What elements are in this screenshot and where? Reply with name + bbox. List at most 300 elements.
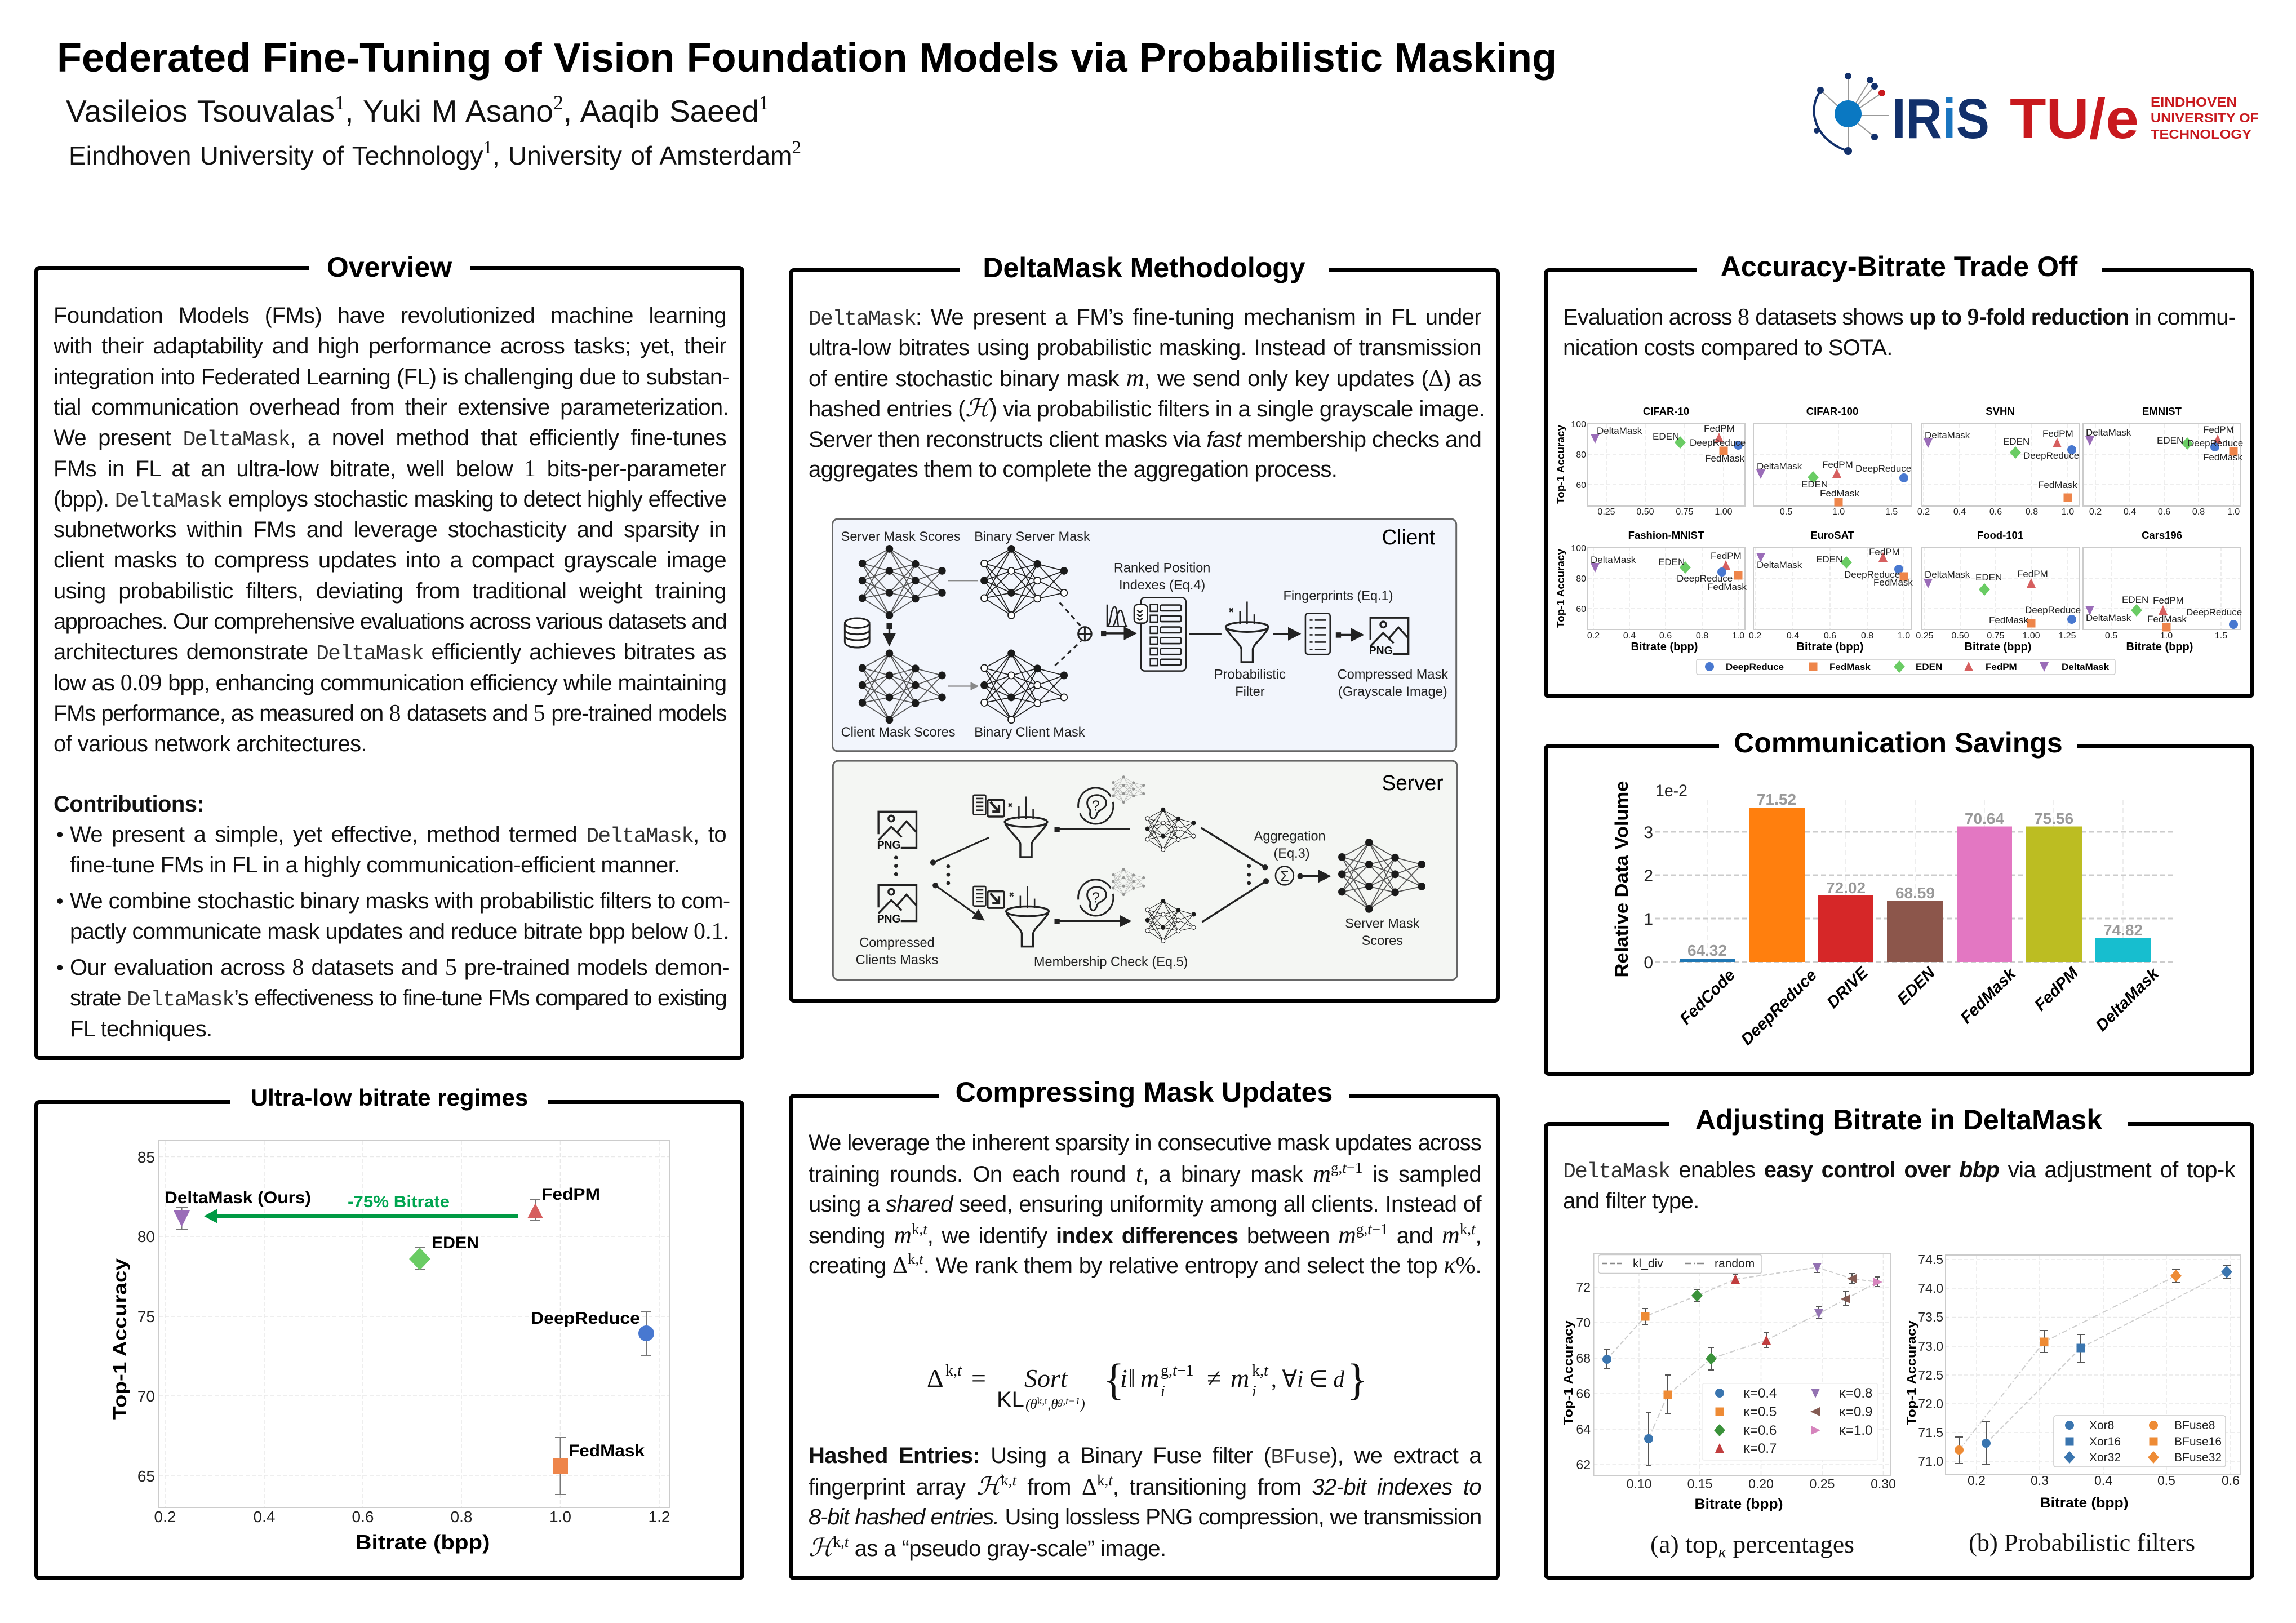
logo text: IRIS: IRiS [1892, 87, 1989, 150]
chart: Cars196: FedPM [2153, 595, 2184, 606]
chart: SVHN [1917, 405, 2079, 517]
equation: sorted index differences: i [1252, 1383, 1256, 1400]
chart: EMNIST: FedPM [2203, 424, 2234, 435]
network: server mask scores: Server Mask Scores [841, 529, 961, 544]
chart: probabilistic filters: 0.4 [2094, 1473, 2112, 1488]
chart: SVHN: DeltaMask [1925, 430, 1970, 441]
text: methodology description: Server then reconstructs client masks via fast membership checks and [809, 427, 1481, 452]
chart: EuroSAT: FedMask [1873, 577, 1913, 588]
chart: Food-101: FedMask [1989, 615, 2028, 626]
point: DeepReduce: DeepReduce [531, 1309, 640, 1328]
chart: top-kappa percentages: 70 [1576, 1315, 1591, 1330]
chart: EuroSAT: 0.4 [1787, 631, 1799, 641]
text: overview paragraph and contributions: low as 0.09 bpp, enhancing communication efficiency while maintaining [54, 670, 726, 696]
text: hashed entries: fingerprint array ℋk,t from Δk,t, transitioning from 32-bit indexes to [809, 1472, 1481, 1500]
point: EDEN [409, 1234, 479, 1270]
legend: DeltaMask [2062, 662, 2110, 672]
chart: top-kappa percentages: 66 [1576, 1386, 1591, 1401]
equation: sorted index differences: k,t [1252, 1362, 1269, 1380]
chart: EMNIST: EMNIST [2142, 405, 2182, 417]
legend: FedMask [1829, 662, 1871, 672]
bullet 3: FL techniques. [70, 1017, 212, 1041]
bullet 2: We combine stochastic binary masks with probabilistic filters to com- [70, 889, 730, 914]
text: overview paragraph and contributions: architectures demonstrate DeltaMask efficiently achieves bitrates as [54, 640, 726, 666]
bar: FedPM: 75.56 [2034, 810, 2073, 827]
chart: Food-101: 0.75 [1987, 631, 2005, 641]
label: ranked position indexes: Indexes (Eq.4) [1119, 578, 1205, 593]
bar: FedPM [2026, 810, 2082, 1014]
chart: EMNIST: 0.4 [2124, 507, 2136, 517]
legend: line style: random [1715, 1257, 1755, 1270]
heading: accuracy-bitrate trade off: Accuracy-Bitrate Trade Off [1721, 251, 2077, 282]
text: methodology description: DeltaMask: We present a FM’s fine-tuning mechanism in FL under [809, 305, 1481, 331]
icons: compressed client masks: PNG [877, 913, 901, 925]
axis tick labels: 0.4 [254, 1508, 275, 1526]
bar: DeltaMask: 74.82 [2103, 921, 2143, 939]
y axis ticks: 3 [1644, 823, 1653, 842]
text: bitrate description [1563, 1158, 2236, 1213]
bar: DeepReduce: DeepReduce [1738, 966, 1820, 1049]
scatter chart: bitrate vs accuracy: 85 [137, 1148, 155, 1166]
bar: FedMask [1957, 810, 2020, 1027]
chart: top-kappa percentages: 0.25 [1810, 1476, 1835, 1491]
caption a: percentages [1726, 1531, 1854, 1558]
chart: Food-101: 0.25 [1916, 631, 1934, 641]
x axis label: Bitrate (bpp) [355, 1531, 490, 1554]
icons: compressed client masks: PNG [877, 839, 901, 852]
heading: ultra-low bitrate regimes: Ultra-low bitrate regimes [251, 1084, 528, 1111]
arrow: -75% bitrate: -75% Bitrate [348, 1193, 450, 1211]
icon: probabilistic filter: Probabilistic [1214, 667, 1286, 682]
chart: SVHN: 0.6 [1989, 507, 2002, 517]
chart: EuroSAT: EDEN [1816, 554, 1842, 565]
chart: CIFAR-10: CIFAR-10 [1643, 405, 1689, 417]
panel: client [833, 519, 1456, 751]
logos: IRIS and TU/e [1813, 73, 2259, 155]
legend [1697, 659, 2115, 675]
chart: Food-101: DeltaMask [1925, 569, 1970, 580]
heading: compressing mask updates: Compressing Mask Updates [956, 1076, 1333, 1108]
icon: ranked position list [1134, 598, 1186, 671]
chart: SVHN: FedMask [2038, 480, 2077, 490]
scatter chart: bitrate vs accuracy: 75 [137, 1308, 155, 1325]
legend: EDEN [1916, 662, 1942, 672]
point: FedMask: FedMask [569, 1442, 645, 1460]
bullet 2: • [56, 889, 63, 912]
icon: database [845, 618, 869, 648]
arrow: -75% bitrate [204, 1193, 518, 1223]
equation: sorted index differences: { [1103, 1355, 1124, 1404]
y ticks: 60 [1576, 605, 1586, 614]
chart: probabilistic filters: 0.6 [2222, 1473, 2240, 1488]
icon: compressed mask PNG: PNG [1369, 645, 1393, 657]
network: binary server mask: Binary Server Mask [974, 529, 1090, 544]
chart: CIFAR-100: 1.5 [1885, 507, 1898, 517]
text: overview paragraph and contributions: using probabilistic filters, deviating from traditional weight training [54, 579, 726, 604]
chart: EuroSAT: 0.6 [1824, 631, 1836, 641]
chart: CIFAR-10: 1.00 [1715, 507, 1733, 517]
chart: top-kappa percentages: 0.10 [1627, 1476, 1651, 1491]
chart: EuroSAT: DeltaMask [1757, 560, 1802, 570]
point: FedPM: FedPM [541, 1185, 600, 1204]
logo text: university name [2151, 95, 2259, 141]
chart: SVHN: 0.8 [2026, 507, 2038, 517]
bar: DRIVE: 72.02 [1826, 879, 1866, 897]
bar: EDEN: EDEN [1894, 964, 1939, 1009]
chart: CIFAR-10: 0.50 [1636, 507, 1654, 517]
chart: CIFAR-100: 0.5 [1780, 507, 1792, 517]
axis tick labels: 1.2 [649, 1508, 670, 1526]
bullet 1 [56, 822, 726, 877]
text: overview paragraph and contributions: subnetworks within FMs and leverage stochasticity and sparsity in [54, 517, 726, 542]
bullet 3: • [56, 956, 63, 979]
chart: Cars196: 0.5 [2105, 631, 2117, 641]
chart: SVHN: 0.2 [1917, 507, 1930, 517]
chart: CIFAR-100: DeepReduce [1855, 463, 1911, 474]
chart: Cars196: Cars196 [2142, 529, 2182, 541]
y axis labels [1555, 425, 1566, 628]
chart: Cars196 [2083, 529, 2242, 653]
label: server: Server [1382, 771, 1444, 795]
bar: FedMask: FedMask [1957, 964, 2020, 1027]
legend: filters: Xor8 [2089, 1419, 2114, 1432]
chart: probabilistic filters: 74.5 [1918, 1252, 1943, 1267]
text: overview paragraph and contributions: We present DeltaMask, a novel method that efficiently fine-tunes [54, 425, 726, 452]
chart: CIFAR-10: DeepReduce [1690, 437, 1746, 448]
chart: top-kappa percentages [1561, 1254, 1896, 1561]
icon: fingerprints: Fingerprints (Eq.1) [1284, 588, 1393, 604]
chart: EuroSAT: 0.8 [1861, 631, 1873, 641]
legend: kappa values: κ=0.6 [1743, 1423, 1777, 1438]
chart: EuroSAT: FedPM [1869, 547, 1900, 557]
chart: EMNIST: 0.8 [2192, 507, 2205, 517]
chart: top-kappa percentages: 62 [1576, 1457, 1591, 1472]
bar: DeltaMask: DeltaMask [2093, 964, 2163, 1035]
scatter chart: bitrate vs accuracy: 65 [137, 1467, 155, 1485]
legend: kappa values: κ=0.8 [1839, 1386, 1872, 1401]
text: overview paragraph and contributions: Foundation Models (FMs) have revolutionized machine learning [54, 303, 726, 328]
text: overview paragraph and contributions: integration into Federated Learning (FL) is challenging due to substan- [54, 365, 729, 389]
network: binary server mask [974, 529, 1090, 619]
legend: kappa values: κ=0.4 [1743, 1386, 1777, 1401]
chart: SVHN: FedPM [2042, 428, 2073, 439]
equation: sorted index differences: i [1120, 1364, 1127, 1393]
chart: probabilistic filters: 73.0 [1918, 1339, 1943, 1354]
y axis label: Top-1 Accuracy [109, 1258, 130, 1420]
chart: EMNIST: FedMask [2203, 452, 2242, 463]
chart: Fashion-MNIST: DeltaMask [1591, 555, 1636, 565]
text: compression description: training rounds. On each round t, a binary mask mg,t−1 is sampled [809, 1159, 1481, 1187]
chart: probabilistic filters: Top-1 Accuracy [1904, 1320, 1918, 1425]
text: accuracy description: Evaluation across 8 datasets shows up to 9-fold reduction in commu- [1563, 304, 2235, 330]
arrow to server mask scores [1298, 873, 1329, 879]
icon: compressed mask PNG: (Grayscale Image) [1338, 684, 1447, 699]
y ticks: 80 [1576, 450, 1586, 460]
equation: sorted index differences: } [1347, 1355, 1367, 1404]
aggregation symbol: (Eq.3) [1274, 846, 1310, 861]
equation: sorted index differences: , ∀i ∈ d [1271, 1367, 1345, 1393]
arrows: membership check [1058, 830, 1130, 921]
legend: kappa values: κ=0.9 [1839, 1404, 1872, 1420]
caption a: (a) top [1650, 1531, 1716, 1558]
heading: ultra-low bitrate regimes [230, 1081, 548, 1115]
chart: CIFAR-10: 0.75 [1676, 507, 1694, 517]
heading: communication savings: Communication Savings [1734, 727, 2063, 759]
diagram: client and server workflow [832, 518, 1458, 981]
bullet 1: fine-tune FMs in FL in a highly communication-efficient manner. [70, 853, 680, 877]
logo text: TU/e: TU/e [2010, 87, 2139, 150]
panel: accuracy-bitrate trade off [1544, 268, 2254, 698]
axis tick labels: 0.2 [154, 1508, 176, 1526]
chart: probabilistic filters: 73.5 [1918, 1310, 1943, 1324]
icon: density curves [1107, 605, 1127, 627]
chart: EuroSAT: Bitrate (bpp) [1797, 641, 1863, 653]
chart: probabilistic filters: 74.0 [1918, 1281, 1943, 1296]
y axis ticks: 0 [1644, 954, 1653, 972]
chart: Fashion-MNIST: Fashion-MNIST [1628, 529, 1704, 541]
point: FedPM [527, 1185, 600, 1220]
chart: EMNIST: EDEN [2157, 435, 2183, 446]
chart: Fashion-MNIST: FedMask [1707, 582, 1747, 592]
aggregation symbol: Σ [1280, 868, 1289, 885]
text: hashed entries: Hashed Entries: Using a Binary Fuse filter (BFuse), we extract a [809, 1443, 1481, 1470]
logo text: university name: EINDHOVEN [2151, 95, 2237, 109]
caption a: κ [1718, 1543, 1727, 1561]
network: client mask scores [841, 650, 956, 740]
chart: CIFAR-100: DeltaMask [1757, 461, 1802, 472]
icons: compressed client masks: Compressed [859, 935, 935, 951]
y ticks [1571, 420, 1586, 614]
chart: Fashion-MNIST: DeepReduce [1677, 573, 1733, 584]
bar: DRIVE [1818, 879, 1873, 1012]
icon: probabilistic filter [1189, 602, 1286, 699]
equation: sorted index differences: m [1231, 1364, 1249, 1393]
equation: sorted index differences [927, 1355, 1367, 1412]
text: compression description: sending mk,t, we identify index differences between mg,t−1 and mk,t, [809, 1221, 1481, 1249]
chart: CIFAR-10 [1588, 405, 1746, 517]
y axis labels: Top-1 Accuracy [1555, 549, 1566, 628]
authors: Vasileios Tsouvalas1, Yuki M Asano2, Aaqib Saeed1 [66, 91, 769, 128]
bullet 1: We present a simple, yet effective, method termed DeltaMask, to [70, 822, 726, 849]
chart: Fashion-MNIST: 0.4 [1623, 631, 1636, 641]
text: methodology description [809, 305, 1485, 482]
legend: kappa values: κ=1.0 [1839, 1423, 1872, 1438]
chart: Food-101: EDEN [1975, 572, 2002, 583]
network: client mask scores: Client Mask Scores [841, 725, 956, 740]
bullet 2: pactly communicate mask updates and reduce bitrate bpp below 0.1. [70, 919, 729, 944]
chart: CIFAR-10: FedPM [1704, 423, 1735, 434]
label: client: Client [1382, 525, 1436, 549]
text: overview paragraph and contributions [54, 303, 730, 1041]
chart: CIFAR-10: EDEN [1653, 431, 1679, 442]
chart: CIFAR-100: 1.0 [1832, 507, 1845, 517]
y axis ticks: 1e-2 [1655, 782, 1687, 800]
bullet 3: strate DeltaMask’s effectiveness to fine-tune FMs compared to existing [70, 986, 726, 1012]
legend: kappa values [1702, 1383, 1878, 1460]
subheading: contributions: Contributions: [54, 792, 204, 817]
text: bitrate description: and filter type. [1563, 1189, 1699, 1213]
chart: EuroSAT [1749, 529, 1913, 653]
chart: EMNIST: 0.6 [2158, 507, 2170, 517]
heading: adjusting bitrate: Adjusting Bitrate in DeltaMask [1695, 1104, 2102, 1136]
legend: filters: Xor16 [2089, 1435, 2121, 1448]
chart: SVHN: EDEN [2003, 436, 2029, 447]
chart: Fashion-MNIST: 0.2 [1587, 631, 1600, 641]
chart: Food-101 [1916, 529, 2081, 653]
chart: Food-101: Bitrate (bpp) [1965, 641, 2031, 653]
label: membership check: Membership Check (Eq.5) [1034, 954, 1188, 970]
panel: server [833, 761, 1458, 980]
text: accuracy description: nication costs compared to SOTA. [1563, 335, 1893, 360]
chart: EMNIST: 0.2 [2089, 507, 2102, 517]
network: binary client mask: Binary Client Mask [974, 725, 1085, 740]
bar: EDEN: 68.59 [1895, 884, 1935, 902]
point: FedMask [553, 1438, 645, 1495]
scatter chart: bitrate vs accuracy [109, 1140, 670, 1554]
chart: probabilistic filters: 71.0 [1918, 1454, 1943, 1469]
chart: Fashion-MNIST: 0.8 [1696, 631, 1708, 641]
chart: top-kappa percentages: 0.30 [1871, 1476, 1896, 1491]
text: overview paragraph and contributions: with their adaptability and high performance across tasks; yet, their [54, 334, 726, 358]
legend: filters: BFuse8 [2174, 1419, 2215, 1432]
chart: probabilistic filters: 72.0 [1918, 1396, 1943, 1411]
equation: sorted index differences: g,t−1 [1058, 1395, 1080, 1407]
chart: probabilistic filters: 72.5 [1918, 1368, 1943, 1382]
panel: compressing mask updates [789, 1094, 1500, 1580]
panel: ultra-low bitrate regimes [34, 1100, 744, 1580]
bar: DeltaMask [2093, 921, 2163, 1035]
icons: membership check lower: ? [1092, 890, 1100, 906]
y axis ticks: 2 [1644, 867, 1653, 885]
axis tick labels: 0.6 [352, 1508, 374, 1526]
text: compression description: We leverage the inherent sparsity in consecutive mask updates across [809, 1130, 1481, 1155]
chart: Food-101: FedPM [2017, 569, 2048, 579]
bar: EDEN [1887, 884, 1943, 1009]
chart: Cars196: EDEN [2122, 595, 2148, 605]
charts: top-kappa and probabilistic filters [1561, 1252, 2241, 1561]
legend: filters: BFuse16 [2174, 1435, 2222, 1448]
equation: sorted index differences: (θ [1025, 1397, 1037, 1412]
icon: compressed mask PNG: Compressed Mask [1338, 667, 1448, 682]
network: binary client mask [974, 650, 1085, 740]
y axis ticks: 1 [1644, 910, 1653, 929]
chart: Food-101: 0.50 [1951, 631, 1969, 641]
chart: Fashion-MNIST: 0.6 [1659, 631, 1672, 641]
legend: DeepReduce [1726, 662, 1784, 672]
chart: Cars196: 1.0 [2160, 631, 2173, 641]
heading: DeltaMask methodology: DeltaMask Methodology [983, 252, 1305, 283]
chart: top-kappa percentages: 0.20 [1748, 1476, 1774, 1491]
chart: Food-101: DeepReduce [2025, 605, 2081, 615]
arrow to ranked indexes [1101, 631, 1135, 636]
text: methodology description: ultra-low bitrates using probabilistic masking. Instead of transmission [809, 335, 1481, 360]
equation: sorted index differences: g,t−1 [1161, 1362, 1194, 1380]
equation: sorted index differences: Δ [927, 1364, 944, 1393]
icon: xor operator [1078, 627, 1091, 641]
chart: probabilistic filters [1904, 1252, 2240, 1557]
y ticks: 100 [1571, 544, 1586, 553]
chart: SVHN: 1.0 [2062, 507, 2074, 517]
equation: sorted index differences: Sort [1024, 1364, 1068, 1393]
axis tick labels [154, 1508, 670, 1526]
point: DeltaMask: DeltaMask (Ours) [165, 1189, 311, 1207]
lines: to aggregation [1201, 828, 1269, 922]
bar: DRIVE: DRIVE [1824, 963, 1872, 1012]
legend: line style: kl_div [1633, 1257, 1663, 1270]
chart: Food-101: Food-101 [1977, 529, 2023, 541]
chart: CIFAR-100: CIFAR-100 [1806, 405, 1858, 417]
network: server mask scores [841, 529, 961, 619]
text: overview paragraph and contributions: FMs performance, as measured on 8 datasets and 5 pre-trained models [54, 700, 726, 726]
chart: SVHN: DeepReduce [2023, 450, 2079, 461]
icon: fingerprints [1284, 588, 1393, 654]
chart: top-kappa percentages: 68 [1576, 1351, 1591, 1365]
networks: reconstructed client masks [1145, 808, 1196, 943]
equation: sorted index differences: ) [1079, 1397, 1085, 1412]
chart: EMNIST: DeltaMask [2086, 427, 2131, 438]
chart: CIFAR-100: FedMask [1820, 488, 1859, 499]
icons: lower filter [974, 886, 1049, 947]
panel: communication savings [1544, 744, 2254, 1076]
text: compression description: creating Δk,t. We rank them by relative entropy and select the top κ%. [809, 1250, 1481, 1279]
chart: Cars196: 1.5 [2215, 631, 2227, 641]
y axis label: Relative Data Volume [1611, 781, 1632, 977]
aggregation symbol: Aggregation [1254, 828, 1326, 844]
chart: SVHN: 0.4 [1953, 507, 1966, 517]
chart: Food-101: 1.00 [2022, 631, 2040, 641]
label: ranked position indexes [1114, 560, 1211, 593]
equation: sorted index differences: KL [997, 1387, 1024, 1412]
point: DeepReduce [531, 1309, 654, 1355]
text: methodology description: aggregates them to complete the aggregation process. [809, 457, 1337, 482]
chart: probabilistic filters: 0.3 [2031, 1473, 2049, 1488]
panel: adjusting bitrate in DeltaMask [1544, 1122, 2254, 1580]
logo text: university name: TECHNOLOGY [2151, 127, 2251, 141]
text: methodology description: of entire stochastic binary mask m, we send only key updates (Δ) as [809, 364, 1481, 392]
y ticks: 80 [1576, 574, 1586, 584]
network: server mask scores [1338, 839, 1425, 948]
icons: membership check upper [1078, 775, 1145, 824]
text: overview paragraph and contributions: client masks to compress updates into a compact grayscale image [54, 548, 726, 573]
equation: sorted index differences: i [1161, 1383, 1165, 1400]
equation: sorted index differences: m [1140, 1364, 1159, 1393]
legend: filters: BFuse32 [2174, 1451, 2222, 1464]
text: accuracy description [1563, 304, 2235, 360]
text: compression description [809, 1130, 1482, 1279]
text: overview paragraph and contributions: tial communication overhead from their extensive parameterization. [54, 395, 729, 420]
legend: FedPM [1986, 662, 2017, 672]
chart: SVHN: SVHN [1986, 405, 2015, 417]
text: hashed entries [809, 1443, 1482, 1562]
equation: sorted index differences: ,θ [1047, 1397, 1058, 1412]
chart: CIFAR-100 [1753, 405, 1911, 517]
network: server mask scores: Server Mask [1345, 916, 1420, 932]
chart: CIFAR-10: 0.25 [1597, 507, 1615, 517]
network: server mask scores: Scores [1362, 933, 1403, 948]
arrows: mask sampling [887, 580, 1081, 686]
arrows: to filters [933, 837, 989, 920]
chart: EMNIST [2083, 405, 2243, 517]
bar chart: relative data volume [1611, 781, 2173, 1049]
chart: probabilistic filters: 0.5 [2157, 1473, 2175, 1488]
y axis ticks [1644, 782, 1687, 972]
chart: CIFAR-10: DeltaMask [1597, 425, 1642, 436]
text: overview paragraph and contributions: (bpp). DeltaMask employs stochastic masking to detect highly effective [54, 487, 726, 513]
bullet 3: Our evaluation across 8 datasets and 5 pre-trained models demon- [70, 955, 729, 981]
label: ranked position indexes: Ranked Position [1114, 560, 1211, 576]
chart: probabilistic filters: Bitrate (bpp) [2040, 1495, 2129, 1511]
point: EDEN: EDEN [432, 1234, 479, 1252]
